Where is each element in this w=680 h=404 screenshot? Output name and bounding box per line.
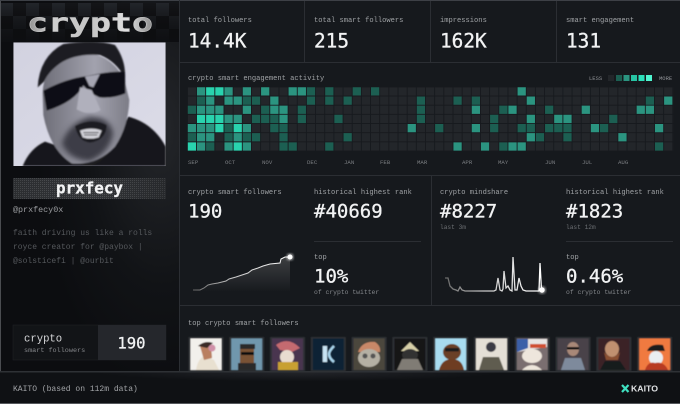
heatmap month labels: AUG [618, 159, 629, 166]
heatmap month labels: DEC [307, 159, 318, 166]
handle: @prxfecy0x [13, 205, 63, 215]
KAITO logo: KAITO [631, 384, 658, 394]
stat: historical highest rank [314, 189, 412, 223]
stat: smart engagement [566, 17, 634, 53]
stat: total followers [188, 17, 252, 53]
KAITO logo [622, 384, 658, 394]
avatar 12 [637, 337, 672, 371]
name banner [13, 178, 166, 199]
avatar row [188, 337, 672, 371]
heatmap month labels [188, 159, 629, 166]
stat: top percent: of crypto twitter [314, 289, 379, 296]
heatmap month labels: APR [462, 159, 473, 166]
stat: impressions: 162K [440, 30, 487, 53]
stat: historical highest rank: historical highest rank [314, 189, 412, 197]
stat: smart engagement: smart engagement [566, 17, 634, 25]
stat: historical highest rank 12m [566, 189, 664, 231]
heatmap month labels: JUN [545, 159, 555, 166]
topic smart followers box: crypto [24, 334, 62, 346]
panel: mindshare stats [440, 189, 673, 296]
stat: top percent [314, 254, 379, 296]
bio [13, 229, 152, 266]
stat: crypto mindshare: last 3m [440, 224, 466, 231]
stat: total smart followers: total smart followers [314, 17, 403, 25]
heatmap month labels: JUL [582, 159, 593, 166]
topic smart followers box: smart followers [24, 347, 85, 355]
heatmap month labels: OCT [225, 159, 236, 166]
heatmap month labels: MAY [498, 159, 509, 166]
stat: crypto mindshare [440, 189, 508, 231]
panel: top stats row [0, 0, 680, 53]
avatar 5 [352, 337, 387, 371]
stat: historical highest rank 12m: #1823 [566, 201, 623, 223]
stat: total followers: 14.4K [188, 30, 247, 53]
avatar 11 [596, 337, 631, 371]
stat: top percent mindshare: 0.46% [566, 266, 624, 288]
footer note: KAITO (based on 112m data) [13, 385, 138, 394]
stat: crypto smart followers [188, 189, 282, 223]
stat: top percent mindshare [566, 254, 631, 296]
heatmap month labels: MAR [417, 159, 428, 166]
heatmap month labels: FEB [380, 159, 391, 166]
heatmap month labels: JAN [344, 159, 354, 166]
avatar 4 [311, 337, 346, 371]
bio: @solsticefi | @ourbit [13, 257, 114, 266]
stat: impressions [440, 17, 487, 53]
stat: smart engagement: 131 [566, 30, 601, 53]
header: crypto topic banner: crypto [27, 8, 153, 38]
avatar 1 [188, 337, 224, 371]
stat: top percent: 10% [314, 266, 349, 288]
panel: footer [0, 371, 680, 404]
stat: historical highest rank 12m: historical highest rank [566, 189, 664, 197]
stat: historical highest rank: #40669 [314, 201, 383, 223]
heatmap month labels: NOV [262, 159, 273, 166]
heatmap grid [188, 87, 673, 151]
stat: crypto mindshare: crypto mindshare [440, 189, 508, 197]
avatar 9 [515, 337, 550, 371]
header: crypto topic banner [1, 3, 179, 42]
name banner: prxfecy [56, 178, 123, 198]
stat: total smart followers [314, 17, 403, 53]
stat: total followers: total followers [188, 17, 252, 25]
stat: total smart followers: 215 [314, 30, 349, 53]
stat: historical highest rank 12m: last 12m [566, 224, 596, 231]
chart: mindshare spikes [445, 257, 546, 294]
topic smart followers box [13, 325, 166, 360]
stat: top percent mindshare: of crypto twitter [566, 289, 631, 296]
stat: top percent: top [314, 254, 327, 262]
bio: faith driving us like a rolls [13, 229, 152, 238]
profile photo [13, 42, 166, 166]
panel: top crypto smart followers [188, 320, 672, 371]
panel: engagement activity heatmap [188, 75, 673, 166]
avatar 3 [270, 337, 305, 371]
avatar 7 [433, 337, 468, 371]
avatar 10 [556, 337, 591, 371]
topic smart followers box: 190 [117, 334, 146, 352]
heatmap legend: MORE [659, 75, 673, 82]
stat: crypto smart followers: 190 [188, 201, 222, 223]
heatmap title: crypto smart engagement activity [188, 75, 325, 83]
avatar 8 [474, 337, 509, 371]
stat: top percent mindshare: top [566, 254, 579, 262]
stat: crypto mindshare: #8227 [440, 201, 497, 223]
stat: crypto smart followers: crypto smart followers [188, 189, 282, 197]
chart: smart followers growth [193, 253, 294, 292]
heatmap legend [589, 75, 673, 82]
heatmap legend: LESS [589, 75, 603, 82]
heatmap month labels: SEP [188, 159, 199, 166]
panel: profile sidebar [0, 0, 179, 404]
followers title: top crypto smart followers [188, 320, 299, 328]
avatar 2 [229, 337, 264, 371]
stat: impressions: impressions [440, 17, 487, 25]
avatar 6 [392, 337, 427, 371]
bio: royce creator for @paybox | [13, 243, 143, 252]
panel: smart followers stats [188, 189, 421, 296]
